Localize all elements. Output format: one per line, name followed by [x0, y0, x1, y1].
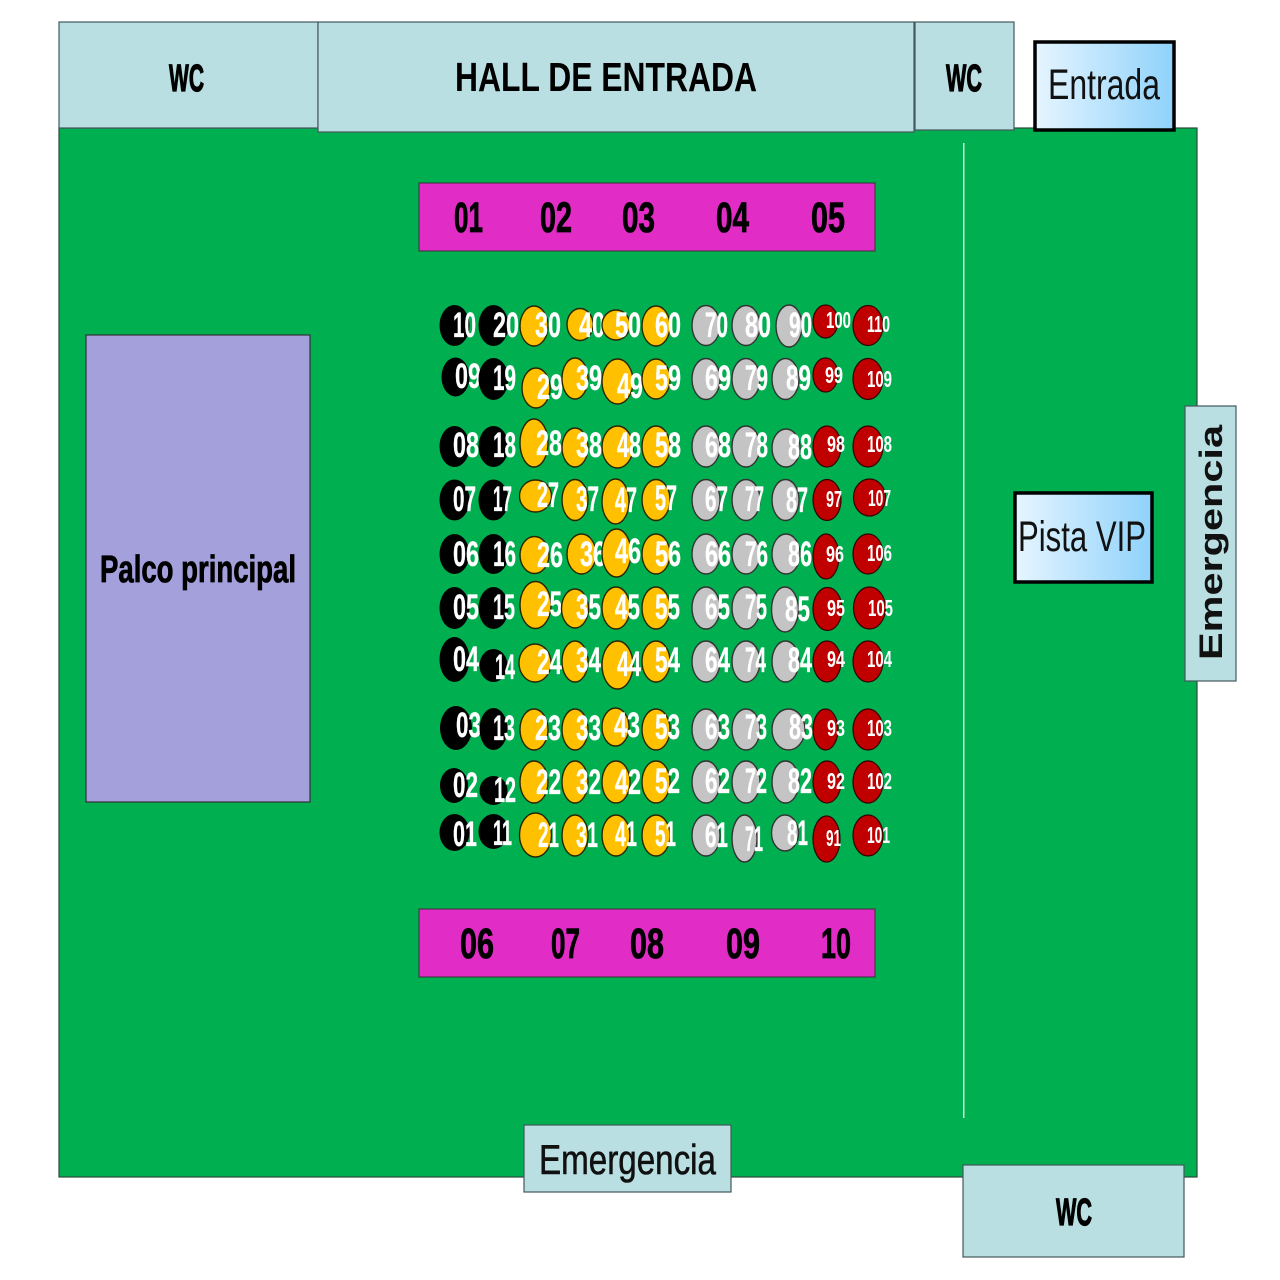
- seat row 9: 02: [453, 766, 478, 805]
- panel: entrada: Entrada: [1048, 61, 1160, 109]
- panel: bottom numbered tables: [419, 909, 875, 977]
- seat row 6: 15: [493, 588, 515, 627]
- seat row 8: 33: [576, 709, 601, 748]
- seat row 1: 100: [826, 307, 851, 333]
- seat row 9: 62: [705, 762, 730, 801]
- panel: WC top right: WC: [946, 58, 982, 100]
- seat row 7: 74: [745, 641, 766, 680]
- seat row 4: 97: [826, 486, 842, 512]
- panel: bottom numbered tables: 09: [726, 920, 760, 968]
- seat row 9: 52: [655, 762, 680, 801]
- seat row 8: 103: [867, 715, 892, 741]
- seat row 6: [440, 582, 893, 632]
- seat row 4: 77: [745, 480, 764, 519]
- seat row 9: 42: [615, 763, 641, 802]
- seat row 4: 07: [453, 480, 476, 519]
- seat row 7: 84: [788, 641, 812, 680]
- seat row 7: 14: [495, 648, 515, 687]
- seat row 1: 50: [615, 306, 641, 345]
- panel: WC bottom: WC: [1056, 1192, 1092, 1234]
- seat row 2: 19: [493, 359, 516, 398]
- panel: top numbered tables: 02: [540, 194, 572, 242]
- panel: WC top left: WC: [169, 58, 204, 100]
- seat row 1: 80: [745, 306, 771, 345]
- seat row 3: 28: [536, 424, 562, 463]
- seat row 10: 31: [576, 816, 598, 855]
- seat row 5: 66: [705, 535, 731, 574]
- seat row 1: 110: [867, 311, 890, 337]
- seat row 2: 09: [455, 357, 481, 396]
- seat row 6: 45: [615, 588, 640, 627]
- seat row 10: 51: [655, 815, 676, 854]
- seat row 6: 35: [576, 588, 601, 627]
- seat row 5: 86: [788, 535, 812, 574]
- seat row 4: 87: [786, 481, 808, 520]
- seat row 5: [440, 529, 892, 579]
- seat row 6: 75: [745, 588, 767, 627]
- seat row 7: [440, 637, 892, 689]
- seat row 4: 37: [576, 480, 599, 519]
- panel: WC top left: [59, 22, 318, 128]
- seat row 7: 24: [537, 643, 562, 682]
- seat row 6: 105: [868, 595, 893, 621]
- seat row 8: [440, 706, 892, 750]
- panel: pista VIP: Pista VIP: [1018, 513, 1146, 561]
- seat row 5: 96: [826, 541, 844, 567]
- seat row 4: 17: [493, 480, 512, 519]
- seat row 8: 23: [535, 709, 561, 748]
- seat row 3: 48: [617, 426, 641, 465]
- seat row 10: 71: [745, 820, 763, 859]
- seat row 3: 58: [655, 426, 681, 465]
- seat row 5: 76: [745, 535, 768, 574]
- seat row 9: 102: [867, 768, 892, 794]
- seat row 8: 73: [745, 708, 767, 747]
- seat row 5: 106: [867, 540, 892, 566]
- seat row 5: 46: [615, 532, 641, 571]
- panel: palco principal: [86, 335, 310, 802]
- panel: emergencia bottom: [524, 1125, 731, 1192]
- seat row 3: 108: [867, 431, 892, 457]
- seat row 1: 20: [493, 306, 519, 345]
- panel: WC bottom: [963, 1165, 1184, 1257]
- seat row 2: [442, 357, 892, 408]
- seat row 10: 21: [538, 816, 559, 855]
- panel: top numbered tables: [419, 183, 875, 251]
- panel: bottom numbered tables: 07: [551, 920, 580, 968]
- seat row 1: [440, 305, 890, 347]
- seat row 3: 38: [576, 426, 602, 465]
- seat row 4: 107: [868, 485, 891, 511]
- panel: top numbered tables: 05: [811, 194, 845, 242]
- seat row 8: 63: [705, 708, 730, 747]
- seat row 3: 78: [745, 426, 768, 465]
- seat row 7: 54: [655, 641, 680, 680]
- seat row 2: 69: [705, 359, 731, 398]
- seat row 7: 34: [576, 641, 601, 680]
- seat row 10: 01: [453, 815, 477, 854]
- seat row 1: 40: [579, 306, 605, 345]
- seat row 6: 95: [827, 595, 845, 621]
- seat row 5: 16: [493, 535, 516, 574]
- seat row 3: [440, 419, 892, 468]
- panel: emergencia right: Emergencia: [1193, 425, 1229, 660]
- seat row 3: 08: [453, 426, 479, 465]
- seat row 9: 22: [536, 763, 561, 802]
- panel: entrada: [1035, 42, 1174, 130]
- divider line: VIP area: [963, 143, 964, 1118]
- panel: WC top right: [915, 22, 1014, 130]
- seat row 1: 70: [705, 306, 728, 345]
- panel: hall de entrada: [318, 22, 914, 132]
- seat row 8: 03: [456, 706, 481, 745]
- seat row 6: 85: [785, 590, 810, 629]
- seat row 7: 104: [867, 646, 892, 672]
- panel: emergencia right: [1185, 406, 1236, 681]
- seat row 2: 59: [655, 359, 681, 398]
- seat row 6: 55: [655, 588, 680, 627]
- seat row 1: 10: [453, 306, 476, 345]
- seat row 1: 90: [789, 306, 812, 345]
- seat row 10: 91: [826, 825, 841, 851]
- seat row 8: 13: [493, 709, 515, 748]
- seat row 3: 88: [788, 428, 812, 467]
- seat row 2: 79: [745, 359, 768, 398]
- seat row 7: 44: [617, 645, 641, 684]
- seat row 2: 99: [825, 362, 843, 388]
- seat row 2: 89: [786, 359, 811, 398]
- panel: top numbered tables: 04: [716, 194, 749, 242]
- seat row 9: 72: [745, 762, 767, 801]
- seat row 10: 11: [493, 814, 512, 853]
- seat row 7: 94: [827, 646, 845, 672]
- seat row 8: 93: [827, 715, 845, 741]
- seat row 9: 12: [494, 771, 516, 810]
- panel: top numbered tables: 03: [622, 194, 655, 242]
- panel: emergencia bottom: Emergencia: [539, 1136, 717, 1183]
- panel: pista VIP: [1015, 493, 1152, 582]
- seat row 5: 26: [537, 536, 563, 575]
- seat row 6: 05: [453, 588, 479, 627]
- panel: top numbered tables: 01: [454, 194, 483, 242]
- panel: green floor: [59, 128, 1197, 1177]
- seat row 7: 04: [453, 640, 479, 679]
- seat row 9: [440, 761, 892, 810]
- seat row 8: 43: [614, 706, 640, 745]
- seat row 1: 60: [655, 306, 681, 345]
- seat row 9: 82: [788, 762, 812, 801]
- seat row 6: 65: [705, 588, 730, 627]
- seat row 10: 61: [705, 816, 728, 855]
- panel: hall de entrada: HALL DE ENTRADA: [455, 54, 757, 100]
- seat row 4: [440, 476, 891, 524]
- panel: bottom numbered tables: 06: [460, 920, 494, 968]
- seat row 10: [440, 813, 890, 862]
- seat row 10: 81: [787, 814, 808, 853]
- seat row 2: 109: [867, 366, 892, 392]
- seat row 3: 68: [705, 426, 731, 465]
- seat row 2: 39: [576, 359, 602, 398]
- seat row 4: 27: [537, 476, 559, 515]
- seat row 8: 53: [655, 708, 680, 747]
- seat row 10: 101: [867, 822, 890, 848]
- seat row 9: 32: [576, 763, 601, 802]
- seat row 6: 25: [537, 585, 562, 624]
- seat row 4: 47: [615, 481, 637, 520]
- seat row 5: 06: [453, 535, 479, 574]
- seat row 10: 41: [615, 815, 637, 854]
- seat row 1: 30: [535, 306, 561, 345]
- seat row 5: 56: [655, 535, 681, 574]
- panel: bottom numbered tables: 08: [630, 920, 664, 968]
- seat row 7: 64: [705, 641, 730, 680]
- seat row 8: 83: [789, 708, 813, 747]
- seat row 4: 57: [655, 479, 677, 518]
- seat row 4: 67: [705, 480, 728, 519]
- seat row 9: 92: [827, 768, 845, 794]
- panel: bottom numbered tables: 10: [821, 920, 851, 968]
- panel: palco principal: Palco principal: [100, 549, 296, 591]
- seat row 5: 36: [580, 535, 606, 574]
- seat row 3: 18: [493, 426, 516, 465]
- seat row 2: 49: [617, 367, 643, 406]
- seat row 3: 98: [827, 431, 845, 457]
- seat row 2: 29: [537, 368, 563, 407]
